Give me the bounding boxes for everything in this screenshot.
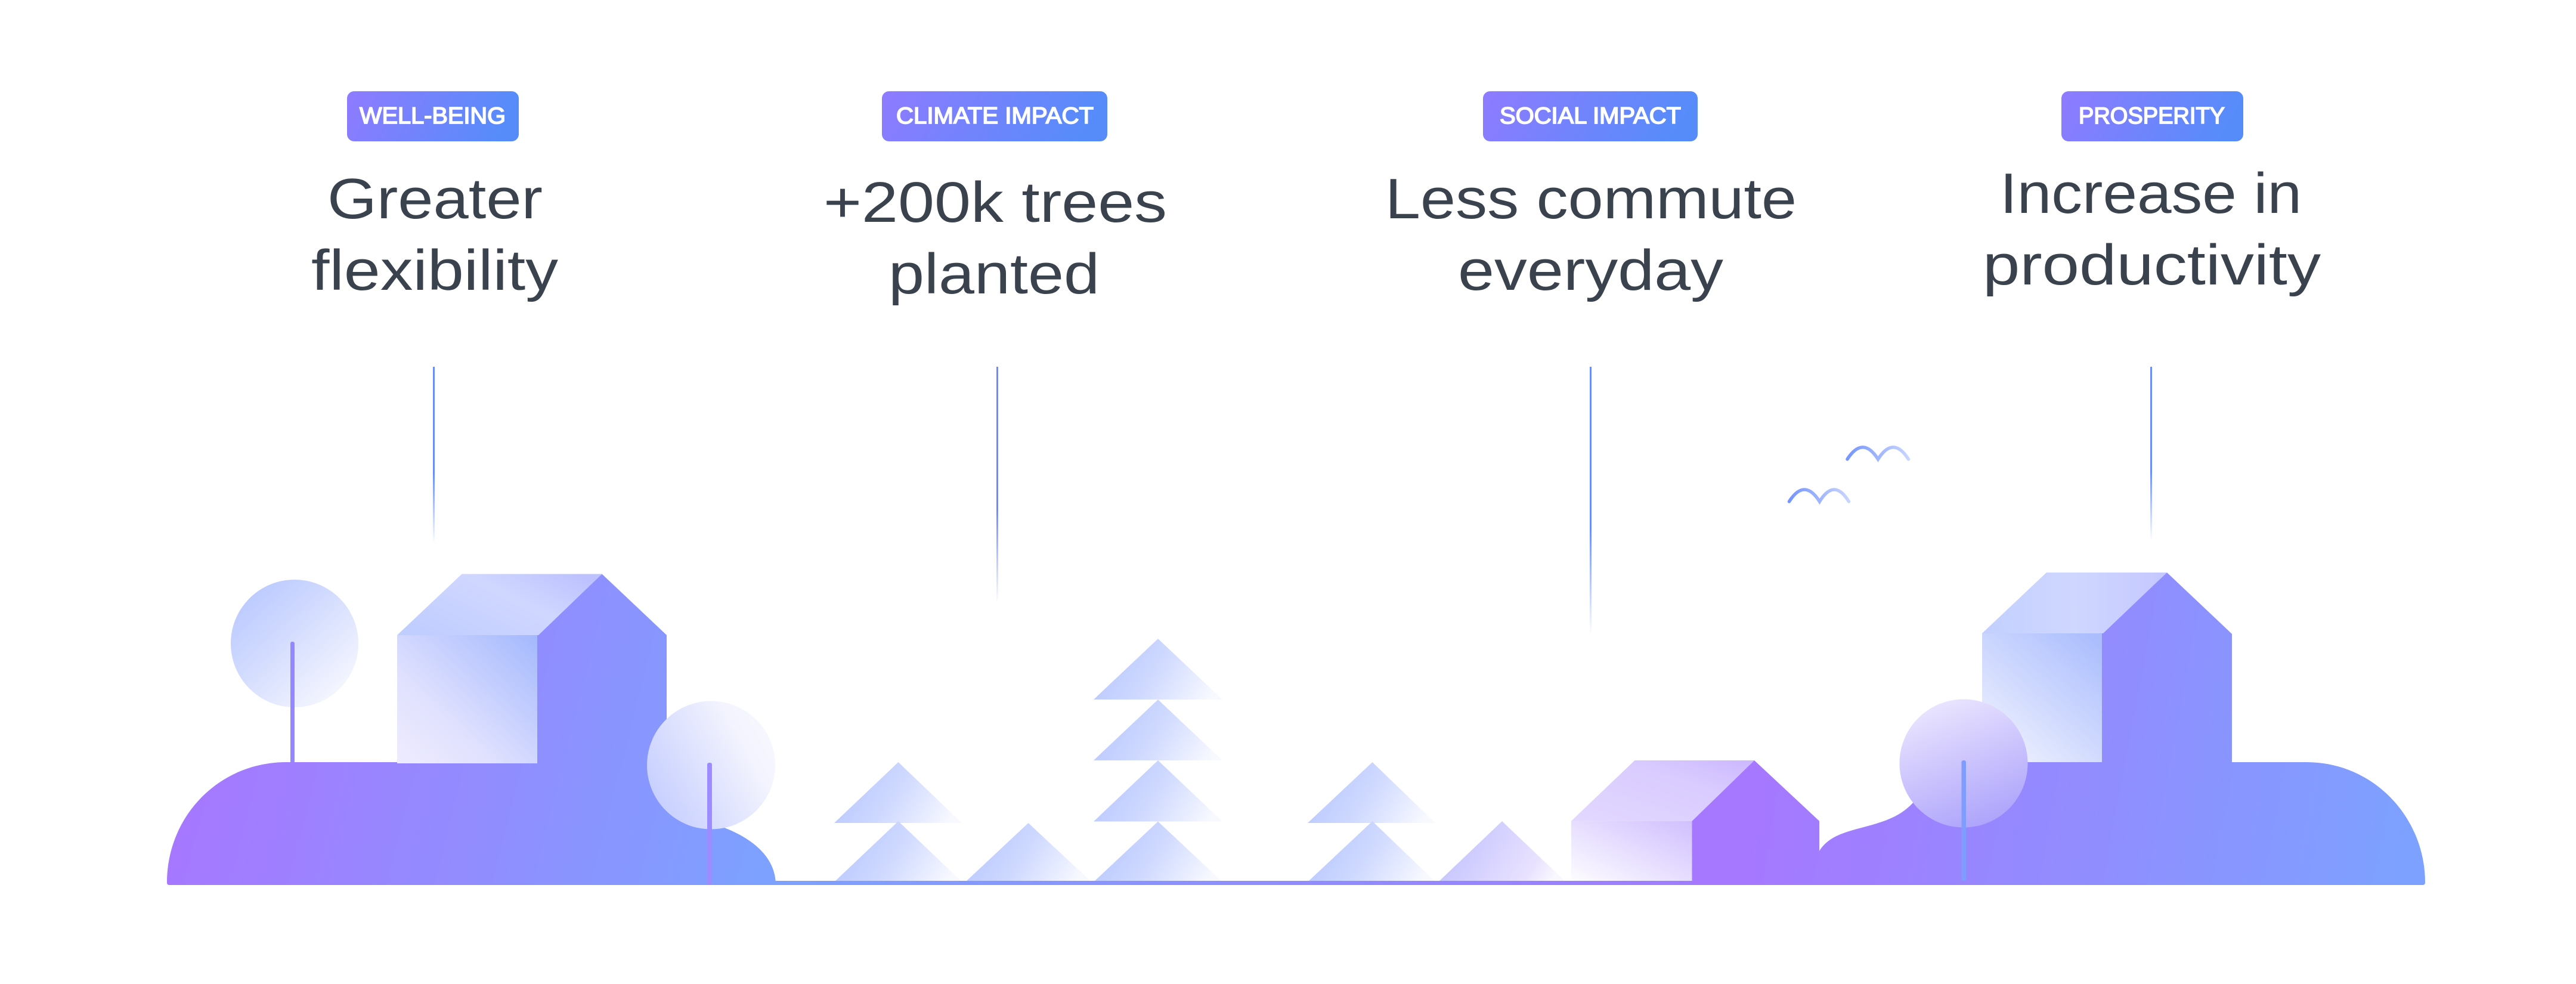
tree: small single bbox=[967, 823, 1090, 881]
connector line bbox=[433, 367, 435, 544]
large house roof bbox=[1982, 573, 2167, 633]
tree: right two-tier bbox=[1308, 762, 1435, 881]
tree: left two-tier bbox=[834, 762, 962, 881]
heading: less commute everyday: Less commute bbox=[1385, 167, 1797, 231]
heading: increase in productivity: Increase in bbox=[2000, 162, 2302, 225]
hill and house side bbox=[167, 574, 776, 885]
badge: well-being: WELL-BEING bbox=[360, 103, 506, 129]
heading: greater flexibility: Greater bbox=[327, 167, 543, 231]
badge: climate impact: CLIMATE IMPACT bbox=[896, 103, 1094, 129]
badge: well-being bbox=[347, 91, 519, 141]
column: prosperity bbox=[1983, 91, 2321, 541]
ground line bbox=[772, 881, 1693, 885]
column: well-being bbox=[311, 91, 558, 544]
small house roof bbox=[1571, 760, 1754, 821]
badge: social impact bbox=[1483, 91, 1698, 141]
heading: increase in productivity: productivity bbox=[1983, 233, 2321, 297]
column: climate impact bbox=[823, 91, 1167, 604]
connector line bbox=[996, 367, 998, 604]
tree: right crown and trunk bbox=[1900, 699, 2027, 881]
heading: +200k trees planted: +200k trees bbox=[823, 171, 1167, 234]
hill and house sides bbox=[1692, 573, 2425, 885]
tree: lower right crown and trunk bbox=[647, 701, 775, 885]
connector line bbox=[1590, 367, 1592, 635]
forest of triangular trees bbox=[834, 639, 1565, 881]
heading: +200k trees planted: planted bbox=[888, 242, 1100, 306]
landscape: right hill with houses and tree bbox=[1571, 573, 2425, 885]
large house front wall bbox=[1982, 633, 2102, 762]
heading: greater flexibility: flexibility bbox=[311, 239, 558, 302]
bird: lower bbox=[1789, 490, 1849, 502]
tree: tall four-tier bbox=[1094, 639, 1222, 881]
column: social impact bbox=[1385, 91, 1797, 635]
badge: climate impact bbox=[882, 91, 1107, 141]
bird: upper bbox=[1847, 447, 1908, 459]
landscape: left hill with house and trees bbox=[167, 574, 776, 885]
house front wall bbox=[397, 635, 537, 763]
heading: less commute everyday: everyday bbox=[1458, 239, 1723, 302]
connector line bbox=[2150, 367, 2152, 541]
badge: prosperity bbox=[2061, 91, 2243, 141]
birds bbox=[1789, 447, 1908, 502]
small house front wall bbox=[1571, 821, 1692, 881]
house roof bbox=[397, 574, 602, 635]
badge: prosperity: PROSPERITY bbox=[2079, 103, 2225, 129]
tree: upper left trunk and crown bbox=[231, 580, 358, 763]
tree: small purple bbox=[1439, 821, 1565, 881]
badge: social impact: SOCIAL IMPACT bbox=[1500, 103, 1681, 129]
